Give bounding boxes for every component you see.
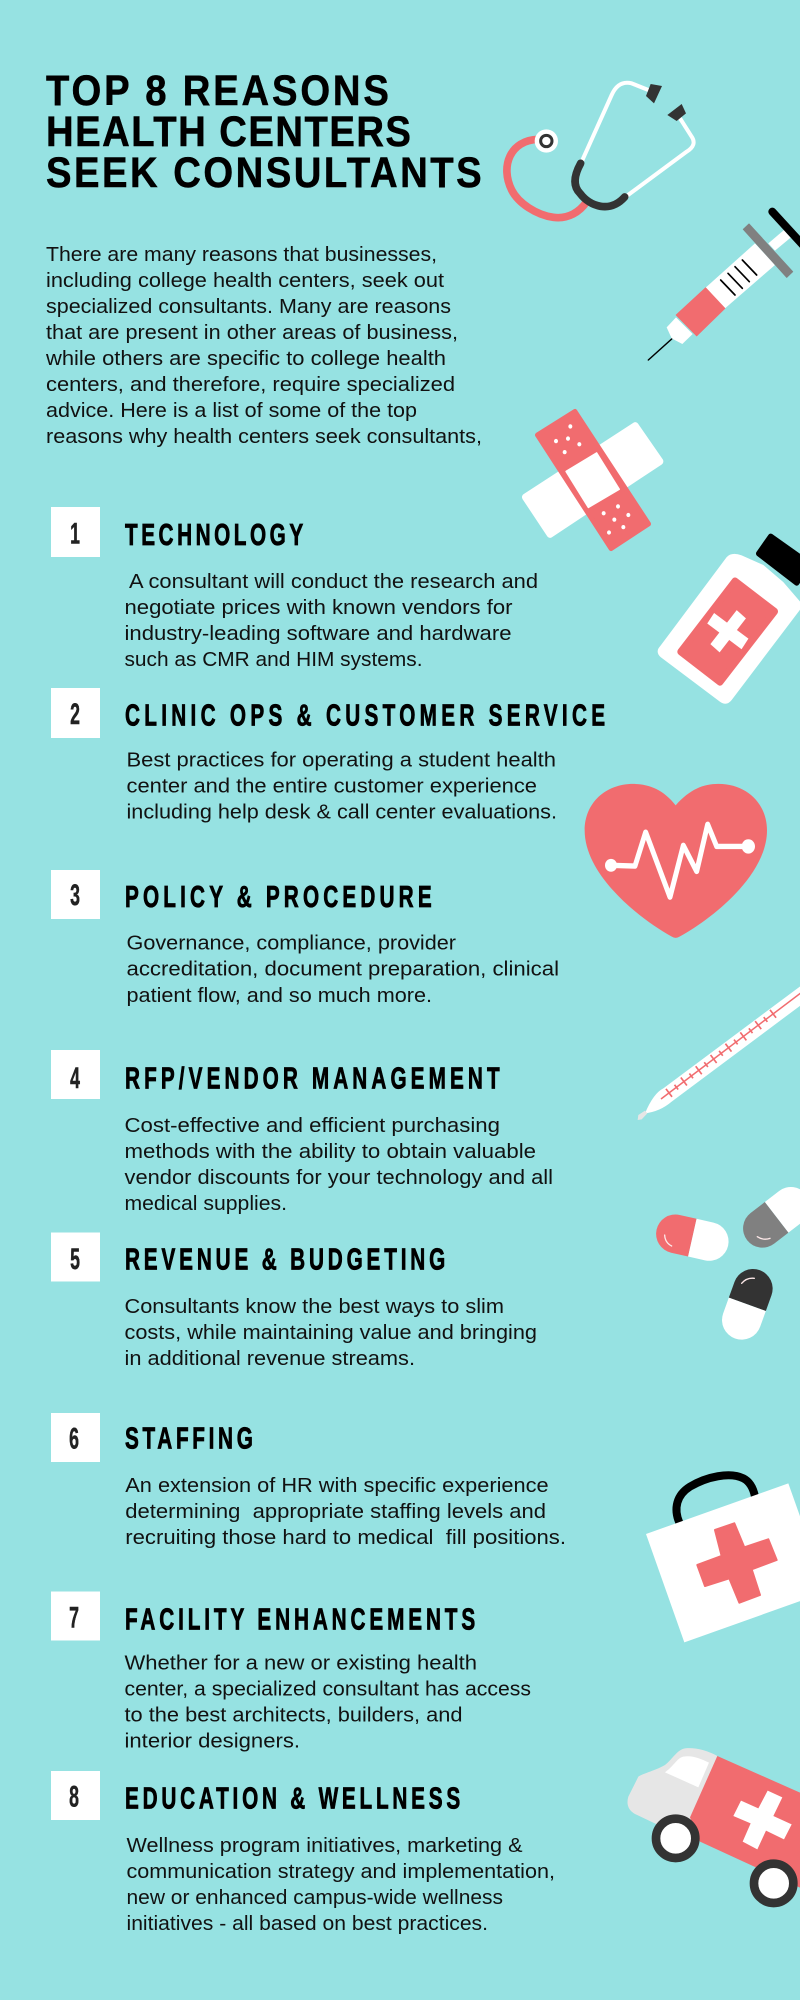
body 7: to the best architects, builders, and <box>124 1705 462 1727</box>
number box 1: 1 <box>70 518 80 551</box>
icon: coral pill <box>652 1211 732 1265</box>
icon: syringe <box>648 212 800 360</box>
heading 7: FACILITY ENHANCEMENTS <box>125 1602 475 1637</box>
item 3: policy <box>51 870 559 1007</box>
body 2: Best practices for operating a student health <box>126 750 556 772</box>
icon: ambulance <box>627 1748 800 1903</box>
body 8: communication strategy and implementation, <box>126 1861 555 1883</box>
heading 3: POLICY & PROCEDURE <box>125 879 432 914</box>
body 8 <box>126 1835 555 1935</box>
body 1: negotiate prices with known vendors for <box>124 597 513 619</box>
intro text: that are present in other areas of business, <box>46 322 458 344</box>
body 7: Whether for a new or existing health <box>124 1653 477 1675</box>
body 4: vendor discounts for your technology and all <box>124 1167 553 1189</box>
body 2: including help desk & call center evaluations. <box>126 802 557 824</box>
item 4: rfp <box>51 1050 553 1215</box>
icon: first aid kit <box>646 1475 800 1642</box>
number box 5: 5 <box>70 1244 80 1276</box>
heading 2: CLINIC OPS & CUSTOMER SERVICE <box>125 698 605 733</box>
number box 7: 7 <box>69 1602 79 1635</box>
number box 3 <box>51 870 100 919</box>
number box 2: 2 <box>70 699 80 731</box>
body 4: medical supplies. <box>124 1193 287 1215</box>
intro text: advice. Here is a list of some of the top <box>46 400 417 422</box>
body 2 <box>126 750 557 824</box>
body 2: center and the entire customer experience <box>126 776 537 798</box>
heading 5: REVENUE & BUDGETING <box>125 1242 445 1277</box>
number box 8 <box>51 1771 100 1820</box>
body 5: Consultants know the best ways to slim <box>124 1296 504 1318</box>
intro text: There are many reasons that businesses, <box>46 244 437 266</box>
icon: gray pill <box>735 1179 800 1255</box>
body 1: A consultant will conduct the research and <box>129 571 538 593</box>
body 1 <box>124 571 538 671</box>
number box 1 <box>51 507 100 557</box>
body 7: center, a specialized consultant has access <box>124 1679 531 1701</box>
body 3 <box>126 933 559 1007</box>
title: TOP 8 REASONS <box>46 66 389 114</box>
body 5: in additional revenue streams. <box>124 1348 415 1370</box>
item 7: facility <box>51 1592 531 1753</box>
number box 5 <box>51 1232 100 1282</box>
heading 6: STAFFING <box>125 1421 253 1456</box>
icon: stethoscope <box>507 83 694 218</box>
body 5 <box>124 1296 537 1370</box>
body 6: determining appropriate staffing levels and <box>125 1501 546 1523</box>
icon: thermometer <box>638 984 800 1120</box>
icon: medicine bottle <box>658 536 800 704</box>
number box 3: 3 <box>70 880 80 912</box>
item 1: technology <box>51 507 538 671</box>
title: HEALTH CENTERS <box>46 107 411 155</box>
item 2: clinic ops <box>51 688 605 824</box>
body 1: such as CMR and HIM systems. <box>124 649 422 671</box>
body 3: patient flow, and so much more. <box>126 985 432 1007</box>
number box 6: 6 <box>69 1423 79 1456</box>
body 5: costs, while maintaining value and bringing <box>124 1322 537 1344</box>
number box 8: 8 <box>69 1781 79 1814</box>
body 6: recruiting those hard to medical fill positions. <box>125 1527 566 1549</box>
intro text: while others are specific to college health <box>45 348 446 370</box>
body 8: new or enhanced campus-wide wellness <box>126 1887 503 1909</box>
item 6: staffing <box>51 1413 566 1549</box>
intro text: including college health centers, seek out <box>46 270 444 292</box>
number box 2 <box>51 688 100 738</box>
number box 7 <box>51 1592 100 1640</box>
heading 1: TECHNOLOGY <box>125 517 303 552</box>
intro text: specialized consultants. Many are reasons <box>46 296 451 318</box>
body 7 <box>124 1653 531 1753</box>
body 6 <box>125 1475 566 1549</box>
body 7: interior designers. <box>124 1731 300 1753</box>
body 6: An extension of HR with specific experience <box>125 1475 549 1497</box>
intro text: centers, and therefore, require specialized <box>46 374 455 396</box>
body 4: Cost-effective and efficient purchasing <box>124 1115 500 1137</box>
heading 4: RFP/VENDOR MANAGEMENT <box>125 1061 500 1096</box>
number box 4 <box>51 1050 100 1099</box>
body 4 <box>124 1115 553 1215</box>
number box 4: 4 <box>70 1063 80 1095</box>
item 5: revenue <box>51 1232 537 1370</box>
body 8: Wellness program initiatives, marketing & <box>126 1835 523 1857</box>
body 1: industry-leading software and hardware <box>124 623 512 645</box>
number box 6 <box>51 1413 100 1462</box>
intro text <box>45 244 482 448</box>
icon: black pill <box>717 1263 778 1345</box>
body 8: initiatives - all based on best practices. <box>126 1913 488 1935</box>
title: SEEK CONSULTANTS <box>46 148 482 196</box>
icon: bandage <box>525 411 660 549</box>
body 4: methods with the ability to obtain valuable <box>124 1141 536 1163</box>
body 3: accreditation, document preparation, clinical <box>126 959 559 981</box>
intro text: reasons why health centers seek consultants, <box>46 426 482 448</box>
body 3: Governance, compliance, provider <box>126 933 456 955</box>
item 8: education <box>51 1771 555 1935</box>
icon: heart with pulse <box>585 784 767 938</box>
heading 8: EDUCATION & WELLNESS <box>125 1781 460 1816</box>
title <box>46 66 482 196</box>
